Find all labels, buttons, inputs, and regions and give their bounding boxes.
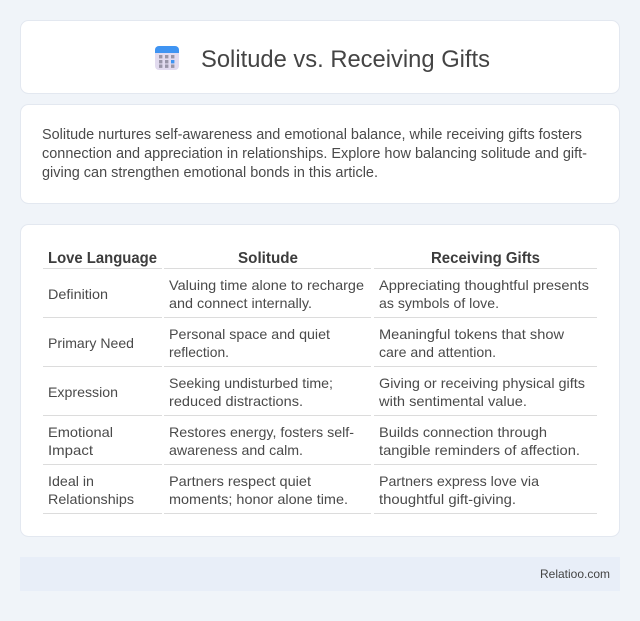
row: Expression: Seeking undisturbed time;	[169, 375, 333, 391]
table header row: Solitude	[238, 250, 298, 267]
row: Primary Need: care and attention.	[379, 344, 496, 360]
panel: comparison table	[20, 224, 620, 536]
row: Emotional Impact	[48, 424, 580, 458]
footer	[20, 557, 620, 591]
row: Emotional Impact: tangible reminders of affection.	[379, 442, 580, 458]
row: Ideal in Relationships: Ideal in	[48, 473, 94, 489]
row: Ideal in Relationships	[48, 473, 539, 507]
row: Ideal in Relationships: moments; honor alone time.	[169, 491, 348, 507]
row: Emotional Impact: Impact	[48, 442, 93, 458]
row: Expression: with sentimental value.	[378, 393, 527, 409]
row: Definition: and connect internally.	[169, 295, 312, 311]
intro text: Solitude nurtures self-awareness and emotional balance, while receiving gifts fosters	[42, 127, 582, 143]
row: Primary Need: Personal space and quiet	[169, 326, 330, 342]
intro text	[42, 127, 587, 181]
row: Definition	[48, 277, 589, 311]
panel: header	[20, 20, 620, 94]
row: Ideal in Relationships: thoughtful gift-giving.	[379, 491, 516, 507]
table header row: Receiving Gifts	[431, 250, 540, 267]
row: Emotional Impact: awareness and calm.	[169, 442, 303, 458]
table row lines	[43, 268, 597, 514]
row: Ideal in Relationships: Partners respect quiet	[169, 473, 311, 489]
row: Definition: as symbols of love.	[379, 295, 499, 311]
panel: intro	[20, 104, 620, 204]
row: Ideal in Relationships: Relationships	[48, 491, 134, 507]
row: Definition: Appreciating thoughtful presents	[379, 277, 589, 293]
row: Primary Need: reflection.	[169, 344, 229, 360]
icon: calendar	[155, 46, 179, 70]
title: Solitude vs. Receiving Gifts	[201, 46, 490, 73]
row: Emotional Impact: Emotional	[48, 424, 113, 440]
row: Definition: Valuing time alone to recharge	[169, 277, 364, 293]
table header row: Love Language	[48, 250, 157, 267]
row: Expression: Giving or receiving physical gifts	[379, 375, 585, 391]
row: Primary Need	[48, 326, 565, 360]
row: Emotional Impact: Builds connection through	[379, 424, 547, 440]
row: Expression	[48, 375, 585, 409]
table header row	[48, 250, 540, 267]
row: Definition: Definition	[48, 286, 108, 302]
row: Expression: Expression	[48, 384, 118, 400]
row: Primary Need: Primary Need	[48, 335, 134, 351]
row: Emotional Impact: Restores energy, fosters self-	[169, 424, 354, 440]
row: Primary Need: Meaningful tokens that show	[379, 326, 565, 342]
footer brand: Relatioo.com	[540, 567, 610, 581]
row: Ideal in Relationships: Partners express love via	[379, 473, 539, 489]
intro text: connection and appreciation in relationships. Explore how balancing solitude and gift-	[42, 146, 587, 162]
row: Expression: reduced distractions.	[169, 393, 303, 409]
intro text: giving can strengthen emotional bonds in this article.	[42, 165, 378, 181]
